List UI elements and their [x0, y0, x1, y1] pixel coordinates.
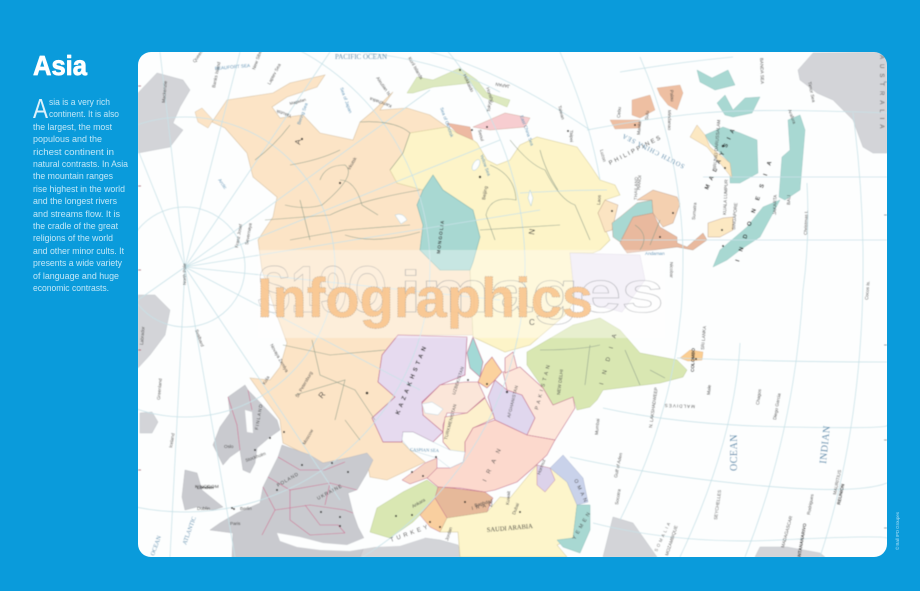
city and physical labels: Honshu	[485, 87, 495, 104]
city and physical labels: BALI	[786, 195, 791, 205]
watermark: ghost outline: images	[400, 260, 664, 325]
ocean labels: ATLANTIC	[182, 516, 198, 546]
city and physical labels: MADAGASCAR	[780, 515, 794, 548]
city markers	[231, 69, 726, 528]
city and physical labels: Arctic	[217, 178, 228, 191]
Oman	[550, 455, 588, 505]
ocean labels: OCEAN	[729, 434, 740, 471]
city and physical labels: Stockholm	[245, 451, 267, 463]
city and physical labels: COLOMBO	[690, 347, 696, 372]
country labels: SOMALIA	[653, 520, 672, 552]
Syria	[420, 498, 447, 532]
text block: introduction: natural contrasts. In Asia	[33, 159, 129, 170]
city and physical labels: Dubai	[511, 502, 520, 515]
country labels: AUSTRALIA	[878, 55, 884, 133]
watermark: Infographics: Infographics	[257, 266, 593, 329]
text block: introduction: the mountain ranges	[33, 171, 113, 182]
country labels: SAUDI ARABIA	[487, 523, 533, 534]
watermark: ghost outline	[257, 252, 664, 326]
city and physical labels: Magadan	[289, 97, 306, 106]
country labels: YEMEN	[572, 509, 593, 541]
country labels: MALAYSIA	[704, 124, 739, 191]
ocean labels	[150, 53, 833, 557]
China	[390, 127, 620, 352]
city and physical labels: Nicobar	[669, 262, 674, 278]
country labels: KAZAKHSTAN	[395, 343, 429, 416]
text block: introduction: the cradle of the great	[33, 221, 118, 232]
country labels: POLAND	[276, 471, 300, 489]
city and physical labels: East China Sea	[519, 115, 535, 147]
country labels: R	[317, 390, 327, 400]
city and physical labels: SRI LANKA	[700, 325, 707, 350]
city and physical labels: SINGAPORE	[731, 202, 738, 230]
Philippines	[610, 85, 683, 129]
Kashmir	[505, 352, 517, 373]
city and physical labels: Sulu	[644, 110, 650, 120]
text block: introduction: economic contrasts.	[33, 283, 109, 294]
city and physical labels: Paris	[230, 521, 241, 526]
city and physical labels	[139, 33, 871, 560]
ocean labels: INDIAN	[818, 425, 833, 464]
city and physical labels: MOZAMBIQUE	[664, 525, 679, 556]
city and physical labels: Seoul	[477, 129, 485, 142]
city and physical labels: Yellow Sea	[479, 154, 492, 177]
city and physical labels: Socotra	[614, 488, 622, 505]
Central Asia	[422, 337, 575, 457]
city and physical labels: Svalbard	[194, 329, 205, 348]
city and physical labels: North Pole	[182, 263, 187, 285]
city and physical labels: Mackenzie	[161, 80, 168, 103]
text block: introduction: religions of the world	[33, 233, 113, 244]
text block: introduction: and other minor cults. It	[33, 246, 124, 257]
text block: introduction: continent. It is also	[49, 109, 119, 120]
Caucasus	[402, 458, 437, 484]
country labels: AFGHANISTAN	[506, 385, 519, 418]
city and physical labels: Mumbai	[594, 418, 600, 435]
Sri Lanka	[680, 350, 703, 361]
city and physical labels: BRUNEI DARUSSALAM	[712, 119, 721, 170]
Europe	[182, 385, 373, 558]
city and physical labels: Tokyo	[486, 99, 492, 112]
city and physical labels: Chagos	[755, 388, 762, 405]
city and physical labels: Oslo	[224, 444, 234, 449]
city and physical labels: ANTANANARIVO	[796, 523, 807, 560]
city and physical labels: HANOI	[636, 175, 642, 190]
Koreas and Japan	[447, 113, 530, 140]
text block: introduction: presents a wide variety	[33, 258, 122, 269]
city and physical labels: Sea of Okhotsk	[439, 107, 455, 139]
text block: introduction: populous and the	[33, 134, 102, 145]
city and physical labels: Bering Sea	[296, 102, 309, 125]
city and physical labels: Hormuz	[536, 458, 547, 475]
city and physical labels: Beijing	[481, 185, 488, 200]
country labels: IRAQ	[471, 501, 496, 512]
city and physical labels: Laos	[596, 194, 602, 205]
Afghanistan	[488, 380, 535, 435]
text block: introduction: and the longest rivers	[33, 196, 117, 207]
ocean labels: CASPIAN SEA	[410, 447, 440, 453]
South-East Asia	[598, 190, 733, 253]
city and physical labels: NEW DELHI	[556, 369, 564, 395]
city and physical labels: Labrador	[139, 326, 146, 345]
city and physical labels: Baghdad	[474, 498, 493, 508]
city and physical labels: Mindanao	[667, 110, 672, 131]
country labels: TURKMENISTAN	[443, 403, 457, 440]
city and physical labels: Sumatra	[691, 202, 698, 220]
city and physical labels: Manila	[636, 121, 642, 135]
watermark: ghost outline: S19O	[257, 252, 387, 326]
Kamchatka tip	[195, 108, 213, 128]
city and physical labels: Kuwait	[505, 490, 511, 505]
text block: introduction	[33, 93, 129, 294]
city and physical labels: Kola	[262, 375, 271, 386]
city and physical labels: JAKARTA	[772, 194, 778, 215]
Yemen	[557, 505, 590, 553]
map panel	[138, 52, 887, 557]
city and physical labels: Taipei	[569, 130, 574, 142]
city and physical labels: JAPAN	[495, 82, 510, 89]
city and physical labels: Ankara	[411, 497, 426, 509]
Iraq	[435, 487, 493, 518]
Tajik	[478, 357, 502, 388]
city and physical labels: BANDA SEA	[759, 58, 765, 85]
text block: introduction: rise highest in the world	[33, 184, 125, 195]
text block: introduction: the largest, the most	[33, 122, 112, 133]
Sarawak	[690, 125, 732, 178]
text block: introduction: sia is a very rich	[49, 97, 110, 108]
city and physical labels: Palau	[669, 90, 675, 102]
Indonesia	[697, 70, 805, 267]
watermark band	[258, 250, 665, 338]
city and physical labels: Hokkaido	[462, 73, 475, 93]
UAE	[537, 465, 555, 492]
city and physical labels: Cocos Is.	[864, 281, 871, 300]
country labels: N	[527, 228, 537, 235]
title: Asia	[33, 50, 87, 81]
European borders	[228, 390, 357, 535]
city and physical labels: Gulf of Aden	[613, 452, 623, 478]
Russia	[212, 75, 473, 480]
city and physical labels: Laptev Sea	[266, 62, 282, 85]
city and physical labels: MALDIVES	[664, 403, 695, 409]
Black Sea	[356, 490, 357, 491]
lakes	[395, 158, 533, 224]
city and physical labels: Christmas I.	[803, 210, 809, 235]
text block: introduction: richest continent in	[33, 147, 114, 158]
city and physical labels: New Siberian	[251, 43, 265, 70]
country labels	[195, 55, 884, 552]
credit: © Ball IPD Groupes	[894, 511, 900, 550]
city and physical labels: Cebu	[616, 106, 622, 118]
city and physical labels: Queen Elizabeth	[192, 33, 216, 64]
Mongolia	[417, 175, 480, 270]
country labels: TURKEY	[390, 524, 431, 544]
Saudi Arabia	[440, 465, 577, 557]
map labels	[139, 33, 884, 560]
ocean	[130, 44, 896, 566]
city and physical labels: Jordan	[444, 526, 453, 541]
India	[527, 318, 687, 410]
city and physical labels: BEAUFORT SEA	[215, 63, 251, 71]
country labels: C	[529, 318, 535, 327]
country labels: PAKISTAN	[534, 362, 553, 411]
city and physical labels: Sea of Japan	[339, 87, 353, 114]
Pakistan	[503, 367, 575, 440]
city and physical labels: Timor Sea	[807, 81, 816, 103]
country labels: PHILIPPINES	[608, 135, 663, 167]
country labels: MONGOLIA	[436, 219, 446, 254]
city and physical labels: Berlin	[240, 506, 252, 511]
Kazakhstan	[372, 335, 467, 442]
city and physical labels: SEYCHELLES	[713, 490, 722, 520]
country labels: INDIA	[599, 325, 621, 386]
country labels: INDONESIA	[735, 152, 776, 263]
ocean labels: SOUTH CHINA SEA	[621, 132, 686, 169]
rivers and internal boundaries	[255, 122, 665, 440]
Uzbekistan	[422, 382, 485, 432]
Myanmar highlands	[570, 253, 645, 312]
city and physical labels: Luzon	[599, 149, 607, 163]
city and physical labels: Greenland	[156, 378, 163, 400]
city and physical labels: Rodrigues	[806, 493, 815, 515]
text block: introduction: and streams flow. It is	[33, 209, 120, 220]
city and physical labels: Andaman	[645, 251, 665, 256]
country labels: UZBEKISTAN	[451, 366, 465, 395]
Turkmenistan	[443, 398, 495, 457]
city and physical labels: St. Petersburg	[295, 370, 314, 398]
Kyrgyz	[467, 337, 483, 377]
city and physical labels: MAURITIUS	[832, 469, 842, 495]
drop cap: A	[33, 93, 48, 124]
Iran	[427, 420, 555, 492]
city and physical labels: KUALA LUMPUR	[722, 179, 729, 215]
city and physical labels: Moscow	[302, 428, 315, 446]
city and physical labels: Novaya Zemlya	[269, 343, 290, 374]
city and physical labels: Irkutsk	[347, 156, 358, 170]
ocean labels: PACIFIC OCEAN	[335, 53, 387, 61]
city and physical labels: Arafura	[787, 109, 797, 125]
text block: introduction: of language and huge	[33, 271, 119, 282]
city and physical labels: Kamchatka	[369, 96, 392, 109]
city and physical labels: Taiwan	[557, 105, 566, 121]
city and physical labels: Kuril Islands	[407, 56, 424, 81]
city and physical labels: Aleutian Is.	[375, 76, 392, 97]
country labels: FINLAND	[254, 403, 264, 430]
country labels: KINGDOM	[195, 484, 219, 489]
city and physical labels: Male	[706, 384, 712, 395]
country labels: A	[293, 138, 303, 145]
city and physical labels: Severnaya	[244, 222, 253, 245]
Alaska	[407, 68, 510, 107]
Aral Sea	[422, 402, 443, 415]
ocean labels: OCEAN	[150, 535, 163, 557]
city and physical labels: Iceland	[168, 432, 176, 448]
Baltic and Mediterranean seas	[245, 410, 425, 551]
city and physical labels: Yakutsk	[275, 108, 292, 119]
city and physical labels: REUNION	[836, 483, 846, 505]
country labels: OMAN	[572, 478, 589, 506]
map edge ticks	[138, 82, 887, 528]
city and physical labels: Franz Josef	[234, 223, 243, 248]
city and physical labels: N. LAKSHADWEEP	[648, 387, 659, 428]
Caspian Sea	[402, 432, 465, 468]
city and physical labels: Diego Garcia	[772, 392, 782, 420]
city and physical labels: Banks Island	[211, 61, 222, 88]
country labels: UKRAINE	[316, 483, 344, 502]
city and physical labels: London	[197, 485, 214, 490]
landmass: other continents	[138, 52, 887, 557]
Turkey	[370, 480, 438, 538]
country labels: THAILAND	[633, 177, 639, 200]
city and physical labels: Dublin	[197, 506, 210, 511]
country labels: IRAN	[482, 442, 506, 483]
